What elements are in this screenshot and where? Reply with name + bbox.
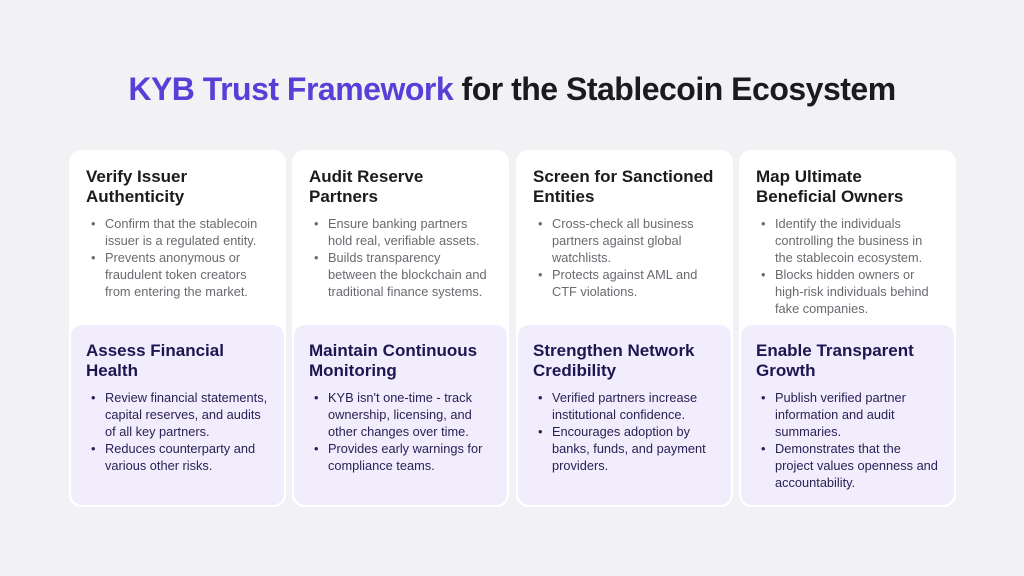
- panel: owners: Map Ultimate: [756, 167, 862, 186]
- panel: assess financial: Reduces counterparty and: [105, 441, 255, 456]
- panel: verify issuer: from entering the market.: [105, 284, 248, 299]
- panel: audit reserve: between the blockchain and: [328, 267, 487, 282]
- panel: card 4: [739, 150, 956, 507]
- panel: owners: Beneficial Owners: [756, 187, 903, 206]
- panel: card 3: [516, 150, 733, 507]
- panel: owners: controlling the business in: [775, 233, 922, 248]
- panel: verify issuer: Authenticity: [86, 187, 184, 206]
- panel: credibility: Strengthen Network: [533, 341, 695, 360]
- panel: assess financial: Review financial statements,: [105, 390, 267, 405]
- panel: credibility: institutional confidence.: [552, 407, 685, 422]
- panel: assess financial: Health: [86, 361, 138, 380]
- panel: audit reserve: Builds transparency: [328, 250, 440, 265]
- panel: audit reserve: traditional finance systems.: [328, 284, 482, 299]
- panel: assess financial: of all key partners.: [105, 424, 210, 439]
- panel: assess financial: various other risks.: [105, 458, 212, 473]
- panel: monitoring: Maintain Continuous: [309, 341, 477, 360]
- panel: monitoring: other changes over time.: [328, 424, 469, 439]
- panel: assess financial: Assess Financial: [86, 341, 224, 360]
- panel: growth: [741, 325, 954, 505]
- panel: credibility: Credibility: [533, 361, 616, 380]
- panel: credibility: [518, 325, 731, 505]
- panel: verify issuer: issuer is a regulated entity.: [105, 233, 256, 248]
- panel: growth: Demonstrates that the: [775, 441, 901, 456]
- panel: audit reserve: [309, 167, 487, 299]
- panel: owners: fake companies.: [775, 301, 868, 316]
- panel: verify issuer: Prevents anonymous or: [105, 250, 240, 265]
- panel: audit reserve: hold real, verifiable assets.: [328, 233, 480, 248]
- panel: growth: summaries.: [775, 424, 841, 439]
- panel: monitoring: Monitoring: [309, 361, 397, 380]
- panel: growth: Publish verified partner: [775, 390, 906, 405]
- panel: owners: the stablecoin ecosystem.: [775, 250, 922, 265]
- panel: verify issuer: Confirm that the stablecoin: [105, 216, 257, 231]
- panel: sanctions: Protects against AML and: [552, 267, 697, 282]
- panel: monitoring: [294, 325, 507, 505]
- panel: credibility: banks, funds, and payment: [552, 441, 706, 456]
- panel: monitoring: Provides early warnings for: [328, 441, 482, 456]
- panel: growth: Growth: [756, 361, 816, 380]
- panel: audit reserve: Partners: [309, 187, 378, 206]
- panel: credibility: Encourages adoption by: [552, 424, 690, 439]
- panel: monitoring: KYB isn't one-time - track: [328, 390, 472, 405]
- panel: owners: [756, 167, 929, 316]
- panel: verify issuer: fraudulent token creators: [105, 267, 247, 282]
- panel: sanctions: CTF violations.: [552, 284, 637, 299]
- panel: growth: information and audit: [775, 407, 895, 422]
- panel: audit reserve: Ensure banking partners: [328, 216, 467, 231]
- panel: card 2: [292, 150, 509, 507]
- panel: credibility: Verified partners increase: [552, 390, 697, 405]
- panel: growth: Enable Transparent: [756, 341, 914, 360]
- panel: assess financial: [71, 325, 284, 505]
- title: KYB Trust Framework for the Stablecoin Ecosystem: [128, 71, 896, 107]
- panel: verify issuer: [86, 167, 257, 299]
- panel: assess financial: capital reserves, and audits: [105, 407, 261, 422]
- panel: verify issuer: Verify Issuer: [86, 167, 187, 186]
- panel: audit reserve: Audit Reserve: [309, 167, 423, 186]
- panel: sanctions: [533, 167, 713, 299]
- panel: sanctions: watchlists.: [552, 250, 611, 265]
- panel: growth: accountability.: [775, 475, 855, 490]
- panel: sanctions: partners against global: [552, 233, 681, 248]
- panel: credibility: providers.: [552, 458, 608, 473]
- panel: sanctions: Entities: [533, 187, 594, 206]
- panel: sanctions: Cross-check all business: [552, 216, 694, 231]
- panel: card 1: [69, 150, 286, 507]
- panel: growth: project values openness and: [775, 458, 938, 473]
- panel: sanctions: Screen for Sanctioned: [533, 167, 713, 186]
- panel: owners: high-risk individuals behind: [775, 284, 929, 299]
- panel: monitoring: ownership, licensing, and: [328, 407, 472, 422]
- panel: owners: Blocks hidden owners or: [775, 267, 914, 282]
- panel: monitoring: compliance teams.: [328, 458, 435, 473]
- panel: owners: Identify the individuals: [775, 216, 901, 231]
